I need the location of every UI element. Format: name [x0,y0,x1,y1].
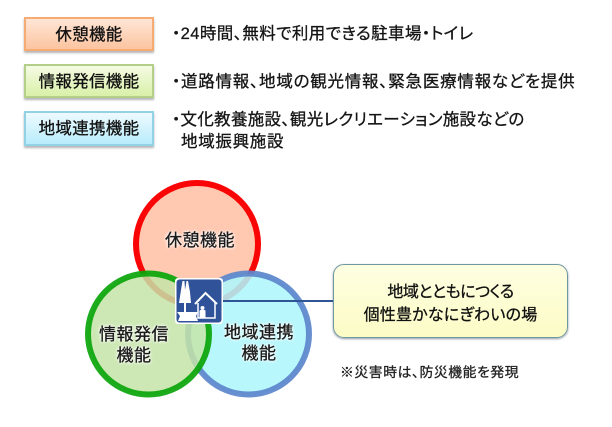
label: regional cooperation function [24,111,154,146]
label: information function: 情報発信機能 [39,73,139,91]
connector line [222,300,334,302]
callout: 地域とともにつくる [387,284,514,301]
text: information: 機能 [116,346,152,365]
text: rest: 休憩機能 [165,231,235,250]
circle: rest [136,183,258,305]
label: rest function: 休憩機能 [55,26,123,44]
callout [333,264,568,338]
callout: 個性豊かなにぎわいの場 [364,307,537,324]
text: regional cooperation: 機能 [242,344,276,363]
description: information function: ・道路情報、地域の観光情報、緊急医療情報などを提供 [172,73,575,91]
description: rest function: ・24時間、無料で利用できる駐車場・トイレ [172,25,474,43]
footnote: ※災害時は、防災機能を発現 [340,365,519,380]
icon: michi-no-eki road station [175,278,223,324]
circle: information [88,274,209,394]
description: regional cooperation function: 地域振興施設 [181,133,284,151]
label: regional cooperation function: 地域連携機能 [39,120,139,138]
description: regional cooperation function [172,110,525,151]
label: information function [24,64,154,98]
description: regional cooperation function: ・文化教養施設、観光レクリエーション施設などの [172,111,525,129]
text: information: 情報発信 [99,325,169,344]
circle: regional cooperation [188,274,309,394]
label: rest function [24,17,154,51]
text: regional cooperation: 地域連携 [224,323,294,342]
text: regional cooperation [223,322,294,363]
text: information [98,324,170,365]
